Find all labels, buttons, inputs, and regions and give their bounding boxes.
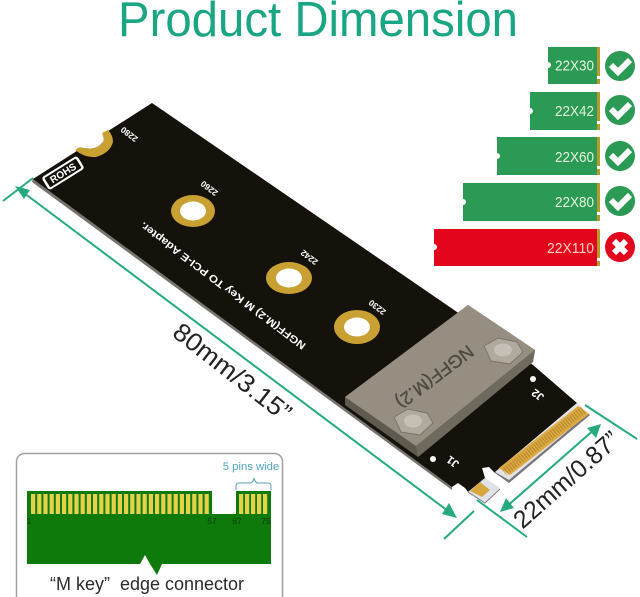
5 pins wide label: 5 pins wide: [223, 461, 279, 473]
dimension: length 80mm: [3, 178, 474, 539]
module 22X42: [527, 92, 600, 130]
caption: “M key” edge connector: [50, 574, 244, 594]
gold fingers long: [495, 403, 590, 483]
mounting hole 2260: [171, 195, 215, 227]
module 22X110: [431, 229, 600, 266]
mounting hole 2242: [266, 262, 312, 294]
cross 22X110: [605, 232, 635, 262]
pin numbers: 75: [261, 516, 271, 526]
module 22X30: [545, 47, 600, 84]
size label 2242: 2242: [298, 248, 320, 267]
connector area markings: J2: [530, 386, 547, 403]
panel: M key edge connector: [16, 454, 282, 597]
check 22X80: [605, 186, 635, 216]
bracket: [236, 478, 271, 490]
module 22X110: 22X110: [547, 240, 594, 257]
label 80mm: 80mm/3.15”: [167, 318, 296, 427]
connector area markings: [430, 376, 547, 470]
module 22X30: 22X30: [555, 58, 594, 74]
standoff notch 2280: [75, 130, 113, 157]
screw left: [394, 409, 433, 435]
board silkscreen text: NGFF(M.2) M Key TO PCI-E Adapter.: [138, 219, 308, 352]
label 22mm: 22mm/0.87”: [508, 426, 625, 534]
check 22X30: [605, 51, 635, 81]
label RoHS: [41, 156, 85, 190]
connector area markings: J1: [445, 453, 462, 470]
pin numbers: 67: [232, 516, 242, 526]
screw right: [484, 338, 523, 364]
pin numbers: 1: [27, 516, 32, 526]
check 22X60: [605, 141, 635, 171]
check 22X42: [605, 95, 635, 125]
module 22X60: [494, 137, 600, 175]
pin numbers: 57: [207, 516, 217, 526]
size label 2230: 2230: [366, 298, 388, 317]
size label 2260: 2260: [198, 179, 220, 198]
heatsink block: [345, 305, 535, 457]
size chart: [431, 47, 635, 266]
pin numbers: [27, 516, 271, 526]
label RoHS: ROHS: [48, 161, 79, 186]
gold pins: [31, 494, 267, 514]
module 22X80: [460, 183, 600, 221]
board side edge: [32, 178, 452, 490]
heatsink text: NGFF(M.2): [392, 341, 477, 412]
dimension: width 22mm: [477, 405, 637, 537]
size label 2280: 2280: [118, 125, 140, 144]
gold fingers short: [468, 478, 500, 503]
module 22X80: 22X80: [555, 194, 594, 211]
board black surface: [33, 103, 577, 492]
adapter board: [32, 103, 590, 503]
green connector board: [27, 491, 271, 575]
mounting hole 2230: [334, 310, 380, 344]
module 22X42: 22X42: [555, 103, 594, 120]
module 22X60: 22X60: [555, 149, 594, 166]
